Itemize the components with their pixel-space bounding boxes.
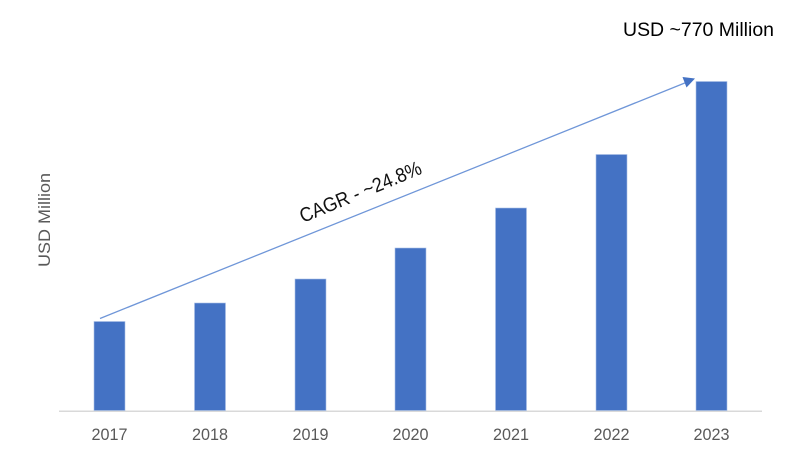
label 2018: 2018 [192,425,228,444]
label 2021: 2021 [493,425,529,444]
final value callout: USD ~770 Million [623,19,774,41]
label 2022: 2022 [594,425,630,444]
bar 2021 [496,208,526,410]
growth arrow [100,77,695,318]
label 2020: 2020 [392,425,428,444]
x axis line [59,410,762,412]
bar 2022 [596,154,627,410]
bar 2019 [295,279,326,410]
CAGR label: CAGR - ~24.8% [296,157,425,228]
bars [94,82,727,410]
bar 2018 [194,303,226,410]
y axis title: USD Million [35,173,54,267]
label 2019: 2019 [292,425,328,444]
label 2023: 2023 [694,425,730,444]
x axis labels [92,425,730,444]
bar 2020 [395,248,426,410]
bar 2023 [696,82,727,410]
label 2017: 2017 [92,425,128,444]
bar 2017 [94,322,125,410]
